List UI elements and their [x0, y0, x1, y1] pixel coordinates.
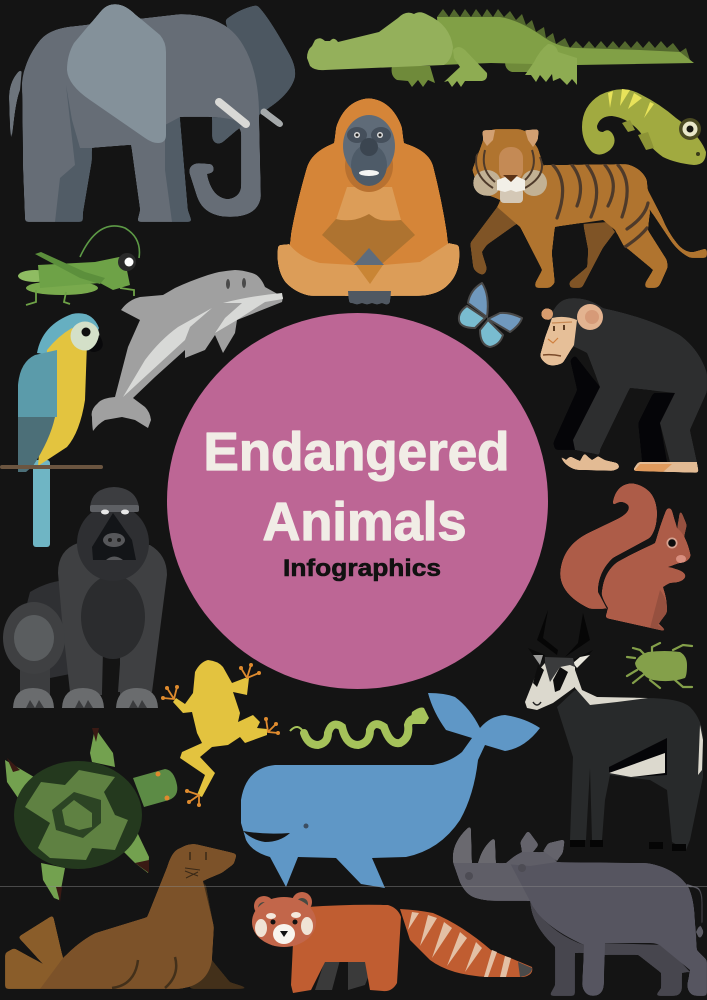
animal: tiger [470, 129, 707, 288]
animal: frog [161, 660, 280, 807]
animal: turtle [5, 728, 177, 902]
fold line [0, 886, 707, 887]
animal: butterfly [459, 283, 522, 347]
animal: rhinoceros [453, 825, 707, 996]
animal: chameleon [582, 89, 706, 165]
animal: antelope [525, 610, 703, 851]
animal: dolphin [92, 270, 283, 431]
animal: chimpanzee [540, 298, 707, 473]
animal: red panda [252, 892, 532, 993]
animal: whale [241, 693, 540, 888]
title circle [167, 313, 548, 689]
animal: squirrel [560, 483, 691, 632]
title: Animals [262, 492, 466, 552]
animal: elephant [9, 4, 295, 222]
animal: sea lion [5, 844, 252, 989]
title [204, 422, 510, 552]
far legs and shaded underside [530, 901, 690, 996]
animal: snake [290, 708, 429, 745]
animal: grasshopper [18, 226, 139, 305]
subtitle: Infographics [283, 555, 441, 582]
animal: orangutan [277, 98, 460, 305]
animal: beetle [627, 643, 692, 688]
animal: crocodile [307, 9, 694, 87]
title: Endangered [204, 422, 510, 482]
animal: gorilla [3, 487, 167, 708]
near body and legs [495, 862, 707, 996]
animal: parrot [0, 313, 103, 547]
